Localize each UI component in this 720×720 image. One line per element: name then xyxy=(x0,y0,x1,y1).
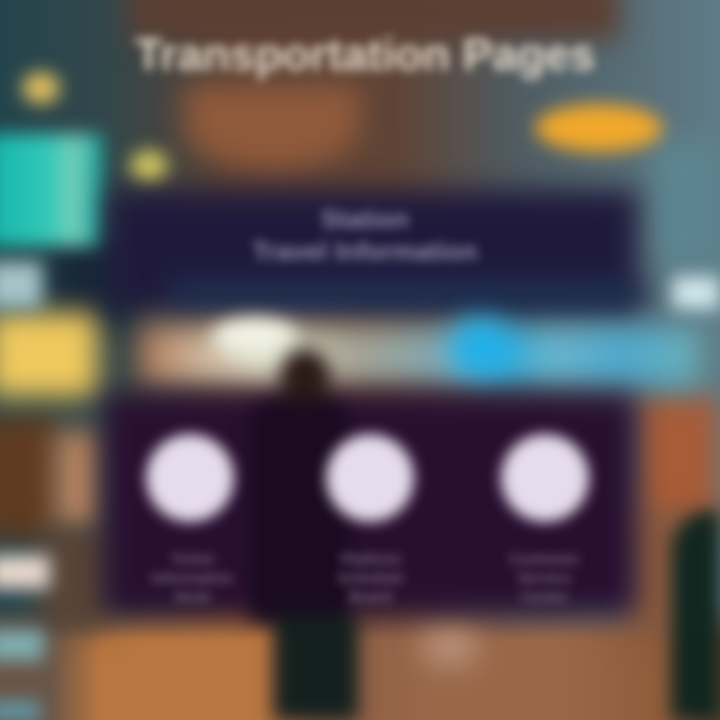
caption one: Ticket xyxy=(171,551,214,568)
pale right sign xyxy=(672,276,720,310)
title: Transportation Pages xyxy=(135,29,595,80)
lower dark panel xyxy=(104,394,636,614)
circle two xyxy=(326,434,414,522)
person head xyxy=(280,349,330,409)
person torso xyxy=(250,401,350,621)
middle bright band xyxy=(140,326,700,386)
background: right wall xyxy=(650,140,720,270)
circle three xyxy=(501,434,589,522)
panel heading: Station xyxy=(321,204,409,234)
caption two xyxy=(334,550,406,606)
teal screen xyxy=(0,134,102,246)
orange ceiling lamp xyxy=(535,104,663,152)
background: left shop dark xyxy=(0,415,60,540)
background: left dark wall xyxy=(50,240,130,330)
caption two: Platform xyxy=(340,551,401,568)
background: left lower wall xyxy=(40,530,110,630)
white left sign xyxy=(0,555,50,589)
caption three: Customer xyxy=(509,551,580,568)
background: right lower wall xyxy=(625,510,695,640)
pale left sign xyxy=(0,262,42,308)
silhouette person xyxy=(242,336,372,720)
caption one: Information xyxy=(151,570,234,587)
panel heading xyxy=(250,204,482,266)
panel heading: Travel Information xyxy=(252,236,478,266)
background: floor pale patch xyxy=(425,625,475,665)
background: upper wood band xyxy=(130,0,620,40)
caption two: Schedule xyxy=(337,570,404,587)
yellow lamp left xyxy=(22,72,60,104)
caption one xyxy=(148,550,236,606)
yellow lamp small xyxy=(130,150,168,184)
upper panel lower band xyxy=(170,280,640,314)
background: right person xyxy=(635,395,720,530)
teal bottom left sign xyxy=(0,702,40,720)
circle one xyxy=(146,434,234,522)
background: ceiling wood xyxy=(185,85,360,170)
caption three: Service xyxy=(518,570,571,587)
caption three: Center xyxy=(521,589,568,606)
caption three xyxy=(507,551,581,606)
yellow shop light xyxy=(0,312,98,397)
upper dark panel xyxy=(108,190,638,310)
background: floor xyxy=(0,600,720,720)
person legs xyxy=(274,615,358,720)
caption one: Desk xyxy=(175,589,210,606)
bright blue patch xyxy=(452,318,510,378)
background: left shop pale xyxy=(55,430,100,530)
caption two: Board xyxy=(349,589,392,606)
dark figure lower right xyxy=(672,510,720,720)
bright white patch xyxy=(212,318,297,356)
teal left sign xyxy=(0,630,44,660)
